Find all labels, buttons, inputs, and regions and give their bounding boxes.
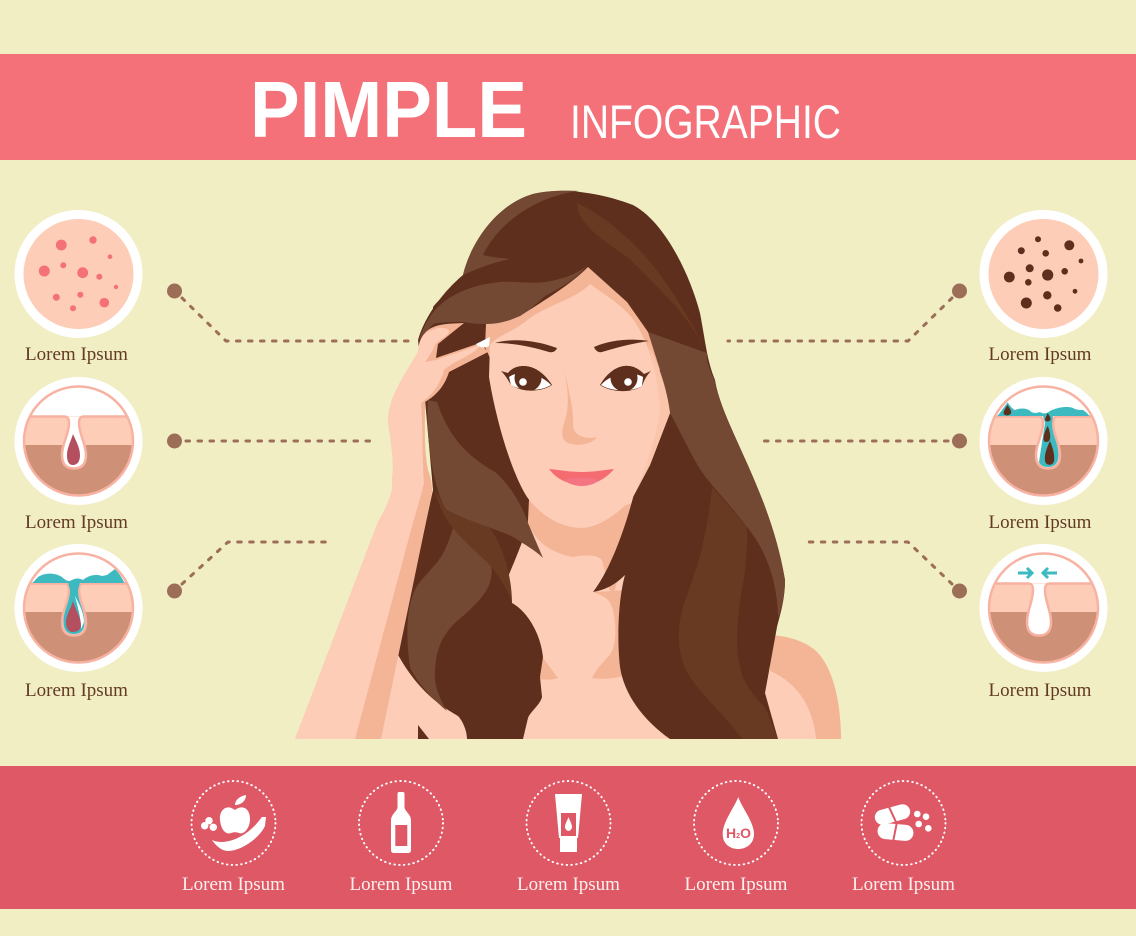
lips: [549, 469, 614, 486]
hair: left long light band: [427, 400, 543, 558]
bottom banner: [0, 766, 1136, 909]
item: bottle: [359, 781, 443, 865]
title: PIMPLE: PIMPLE: [250, 65, 527, 154]
hair: crown light crescent: [463, 191, 580, 275]
fingernail: [476, 337, 490, 347]
right shoulder: [762, 635, 841, 739]
bottom banner: Lorem Ipsum: [852, 874, 955, 895]
hair: lower left mid lock: [435, 490, 512, 603]
dashed connectors: [167, 284, 967, 598]
torso and neck: [380, 490, 680, 739]
subtitle: INFOGRAPHIC: INFOGRAPHIC: [570, 95, 841, 148]
face: [485, 267, 670, 528]
panel: pore with sebum: [14, 544, 142, 701]
eyes: [501, 364, 651, 392]
item: water drop: H2O: [726, 825, 751, 841]
hair: right light band: [648, 332, 785, 618]
hair: fringe light: [419, 266, 587, 340]
hair: small lower lock: [418, 725, 429, 739]
panel: closing pore: Lorem Ipsum: [989, 680, 1092, 701]
panel: red spots on skin: Lorem Ipsum: [25, 344, 128, 365]
item: fruit: [192, 781, 276, 865]
panel: inflamed pore: [14, 377, 142, 533]
panel: closing pore: [980, 544, 1108, 701]
bottom banner: Lorem Ipsum: [182, 874, 285, 895]
arrows: [1018, 568, 1057, 578]
title banner: [0, 54, 1136, 160]
hair: right mid strand: [577, 203, 705, 349]
panel: dark spots on skin: [980, 210, 1108, 365]
panel: pore with sebum: Lorem Ipsum: [25, 680, 128, 701]
bottom banner: Lorem Ipsum: [685, 874, 788, 895]
panel: red spots on skin: [14, 210, 142, 365]
hair: right mid band: [679, 487, 778, 739]
panel: blackhead pore: Lorem Ipsum: [989, 512, 1092, 533]
item: pills: [862, 781, 946, 865]
bottom banner: Lorem Ipsum: [350, 874, 453, 895]
item: water drop: [694, 781, 778, 865]
eyebrows: [495, 340, 649, 352]
item: tube: [526, 781, 610, 865]
panel: dark spots on skin: Lorem Ipsum: [989, 344, 1092, 365]
hair: lower left light lock: [407, 528, 492, 711]
nose: [562, 362, 597, 445]
panel: blackhead pore: [980, 377, 1108, 533]
bottom banner: Lorem Ipsum: [517, 874, 620, 895]
arm and hand: [295, 323, 490, 739]
woman illustration: [295, 191, 841, 739]
hair: back mass: [397, 191, 785, 739]
panel: inflamed pore: Lorem Ipsum: [25, 512, 128, 533]
hair: fringe dark: [433, 259, 588, 323]
